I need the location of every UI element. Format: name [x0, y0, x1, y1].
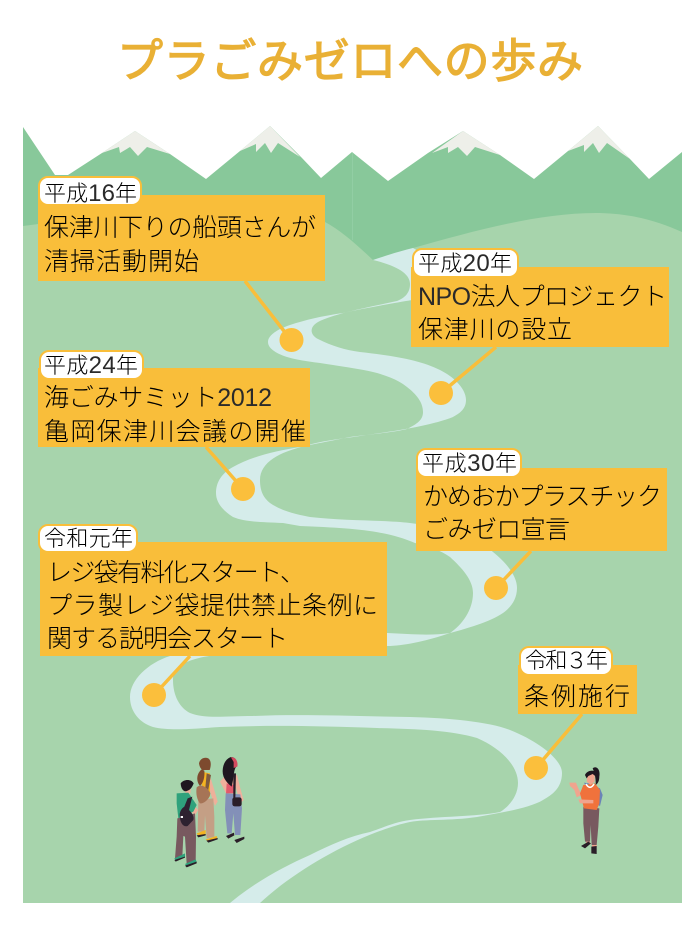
callout: 平成20年: 平成20年 [418, 250, 512, 277]
hiker: person with brown backpack [196, 758, 218, 843]
marker dot 4 [484, 576, 508, 600]
callout: 平成24年: 亀岡保津川会議の開催 [44, 418, 306, 446]
river [130, 248, 562, 903]
marker dot 6 [524, 756, 548, 780]
callout: 令和3年 [518, 647, 637, 714]
marker dot 2 [429, 381, 453, 405]
callout: 令和元年: 関する説明会スタート [47, 625, 288, 653]
callout: 平成16年: 清掃活動開始 [44, 248, 199, 276]
callout: 平成16年: 平成16年 [44, 180, 137, 207]
callout: 平成16年 [38, 177, 325, 281]
mountains [23, 126, 682, 300]
callout: 令和3年: 条例施行 [524, 683, 630, 711]
green hills and meadow [23, 197, 682, 903]
callout: 平成16年: 保津川下りの船頭さんが [44, 214, 316, 242]
callout: 令和元年: プラ製レジ袋提供禁止条例に [47, 592, 378, 620]
panel: landscape background [23, 126, 682, 903]
callout: 平成24年: 平成24年 [44, 352, 138, 379]
snow caps [102, 126, 630, 159]
connector 6 [536, 714, 582, 768]
callout: 平成20年: 保津川の設立 [418, 316, 572, 344]
hiker: person with dark backpack [174, 780, 198, 867]
illustration: group of three hikers [174, 757, 244, 867]
connector 2 [441, 347, 496, 393]
marker dot 1 [280, 328, 304, 352]
marker dot 3 [231, 477, 255, 501]
callout: 令和元年: レジ袋有料化スタート、 [47, 559, 305, 587]
callout: 令和3年: 令和３年 [525, 648, 608, 673]
hiker: woman with headphones [220, 757, 244, 843]
callout: 平成24年: 海ごみサミット2012 [44, 384, 272, 412]
connector 3 [206, 447, 243, 489]
connector 1 [245, 281, 291, 340]
callout: 平成30年: かめおかプラスチック [423, 483, 662, 511]
connector 5 [154, 656, 190, 695]
callout: 平成20年 [411, 249, 669, 347]
callout: 平成24年 [38, 351, 310, 447]
callout: 令和元年: 令和元年 [44, 526, 133, 551]
title: プラごみゼロへの歩み [117, 25, 583, 91]
callout: 平成30年: 平成30年 [422, 450, 517, 477]
callout: 平成20年: NPO法人プロジェクト [418, 283, 667, 311]
callout: 平成30年: ごみゼロ宣言 [423, 516, 570, 544]
connector 4 [496, 551, 531, 588]
illustration: guide woman [569, 767, 603, 854]
callout: 平成30年 [416, 449, 667, 551]
marker dot 5 [142, 683, 166, 707]
callout: 令和元年 [39, 525, 387, 656]
